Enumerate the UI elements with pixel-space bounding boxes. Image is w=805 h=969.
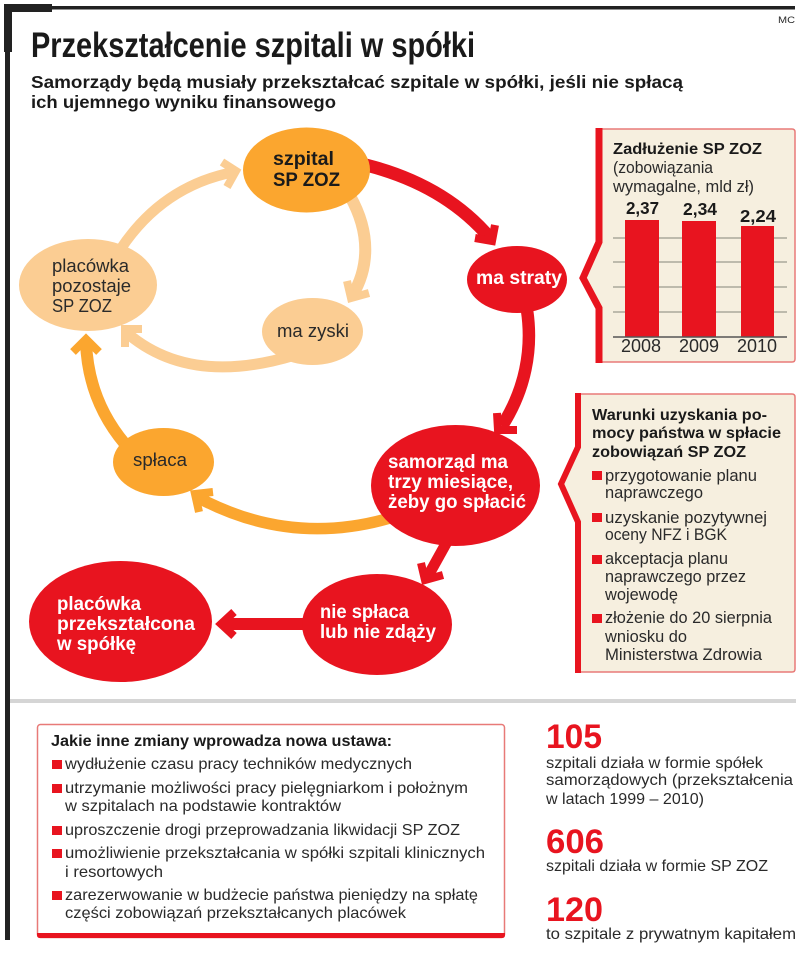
condition 1: naprawczego [605, 484, 703, 502]
node: samorząd ma trzy miesiące: żeby go spłacić [388, 492, 526, 513]
stat: 120: to szpitale z prywatnym kapitałem [546, 926, 796, 943]
arrow: spłaca to placówka [73, 339, 125, 444]
change 5: części zobowiązań przekształcanych placówek [65, 905, 407, 922]
arrow: szpital to ma zyski [347, 196, 369, 298]
node: nie spłaca lub nie zdąży: lub nie zdąży [320, 622, 436, 643]
node: szpital SP ZOZ [243, 128, 370, 212]
change 4 [52, 845, 485, 881]
bar 2008 [621, 198, 661, 356]
node: samorząd ma trzy miesiące [371, 425, 540, 546]
change 2: utrzymanie możliwości pracy pielęgniarkom i położnym [65, 780, 468, 797]
condition 3: naprawczego przez [605, 568, 746, 586]
node: spłaca: spłaca [133, 450, 188, 470]
node: ma straty [467, 246, 567, 313]
bar 2010 [737, 206, 777, 356]
condition 4: złożenie do 20 sierpnia [605, 609, 773, 627]
condition 3 [592, 550, 746, 604]
bar 2008: 2,37 [626, 198, 659, 218]
bar 2009: 2009 [679, 336, 719, 356]
condition 2: oceny NFZ i BGK [605, 526, 727, 544]
stat: 105: szpitali działa w formie spółek [546, 755, 764, 772]
panel: other changes [37, 724, 505, 938]
condition 1: przygotowanie planu [605, 467, 757, 485]
condition 1 [592, 467, 757, 502]
subtitle: Samorządy będą musiały przekształcać szpitale w spółki, jeśli nie spłacą [31, 72, 683, 92]
node: placówka pozostaje SP ZOZ [19, 239, 157, 331]
condition 2: uzyskanie pozytywnej [605, 509, 767, 527]
change 4: umożliwienie przekształcania w spółki szpitali klinicznych [65, 845, 485, 862]
arrow: ma zyski to placówka [125, 329, 295, 367]
change 5: zarezerwowanie w budżecie państwa pieniędzy na spłatę [65, 887, 478, 904]
node: samorząd ma trzy miesiące: samorząd ma [388, 452, 508, 473]
node: ma zyski: ma zyski [277, 321, 349, 341]
change 2 [52, 780, 468, 815]
chart heading: Zadłużenie SP ZOZ [613, 141, 762, 158]
change 2: w szpitalach na podstawie kontraktów [64, 798, 341, 815]
chart heading [612, 141, 762, 196]
chart heading: wymagalne, mld zł) [612, 178, 754, 196]
stat: 105: 105 [546, 718, 602, 756]
condition 4: wniosku do [604, 628, 687, 646]
change 4: i resortowych [65, 864, 163, 881]
conditions heading: Warunki uzyskania po- [592, 407, 767, 424]
condition 4: Ministerstwa Zdrowia [605, 646, 763, 664]
panel: debt bar chart [583, 128, 795, 363]
node: placówka przekształcona w spółkę [29, 561, 212, 682]
arrow: samorząd to nie spłaca [421, 540, 448, 580]
node: samorząd ma trzy miesiące: trzy miesiące, [388, 472, 513, 493]
node: placówka przekształcona w spółkę: przekształcona [57, 614, 195, 635]
node: szpital SP ZOZ: SP ZOZ [273, 170, 340, 191]
change 5 [52, 887, 478, 922]
stat: 606: szpitali działa w formie SP ZOZ [546, 858, 768, 875]
arrow: ma straty to samorząd [497, 310, 529, 430]
bar 2010: 2,24 [740, 206, 776, 226]
bar 2008: 2008 [621, 336, 661, 356]
node: szpital SP ZOZ: szpital [273, 149, 334, 170]
change 3: uproszczenie drogi przeprowadzania likwidacji SP ZOZ [65, 822, 460, 839]
node: placówka przekształcona w spółkę: w spółkę [56, 634, 136, 655]
bar 2009: 2,34 [683, 199, 717, 219]
stat: 105 [545, 718, 793, 808]
node: ma straty: ma straty [476, 268, 562, 289]
title: Przekształcenie szpitali w spółki [31, 26, 475, 65]
chart heading: (zobowiązania [613, 159, 714, 177]
arrow: nie spłaca to przekształcona [221, 612, 306, 636]
condition 4 [592, 609, 773, 664]
conditions heading [592, 407, 781, 461]
bar 2010: 2010 [737, 336, 777, 356]
stat: 120: 120 [546, 891, 603, 929]
node: placówka pozostaje SP ZOZ: placówka [52, 256, 130, 276]
arrow: samorząd to spłaca [195, 492, 390, 529]
change 1: wydłużenie czasu pracy techników medycznych [64, 756, 412, 773]
condition 3: akceptacja planu [605, 550, 728, 568]
stat: 105: samorządowych (przekształcenia [546, 772, 793, 789]
arrow: szpital to ma straty [366, 165, 495, 241]
node: placówka pozostaje SP ZOZ: SP ZOZ [52, 296, 112, 316]
panel: conditions for state aid [561, 393, 795, 673]
credit: MC: MC [778, 15, 796, 25]
subtitle [31, 72, 683, 112]
node: nie spłaca lub nie zdąży: nie spłaca [320, 602, 409, 623]
stat: 606: 606 [546, 823, 604, 861]
flow diagram [19, 128, 567, 682]
node: placówka przekształcona w spółkę: placówka [57, 594, 141, 615]
node: placówka pozostaje SP ZOZ: pozostaje [52, 276, 131, 296]
condition 2 [592, 509, 767, 544]
conditions heading: mocy państwa w spłacie [592, 425, 781, 442]
node: spłaca [113, 428, 214, 496]
arrow: placówka to szpital [120, 162, 236, 250]
node: nie spłaca lub nie zdąży [302, 574, 452, 675]
condition 3: wojewodę [604, 586, 678, 604]
stat: 120 [546, 891, 796, 943]
stat: 606 [546, 823, 768, 875]
bar 2009 [679, 199, 719, 356]
subtitle: ich ujemnego wyniku finansowego [31, 92, 336, 112]
other changes heading: Jakie inne zmiany wprowadza nowa ustawa: [51, 733, 392, 750]
node: ma zyski [262, 298, 363, 365]
stat: 105: w latach 1999 – 2010) [545, 791, 704, 808]
conditions heading: zobowiązań SP ZOZ [592, 444, 746, 461]
